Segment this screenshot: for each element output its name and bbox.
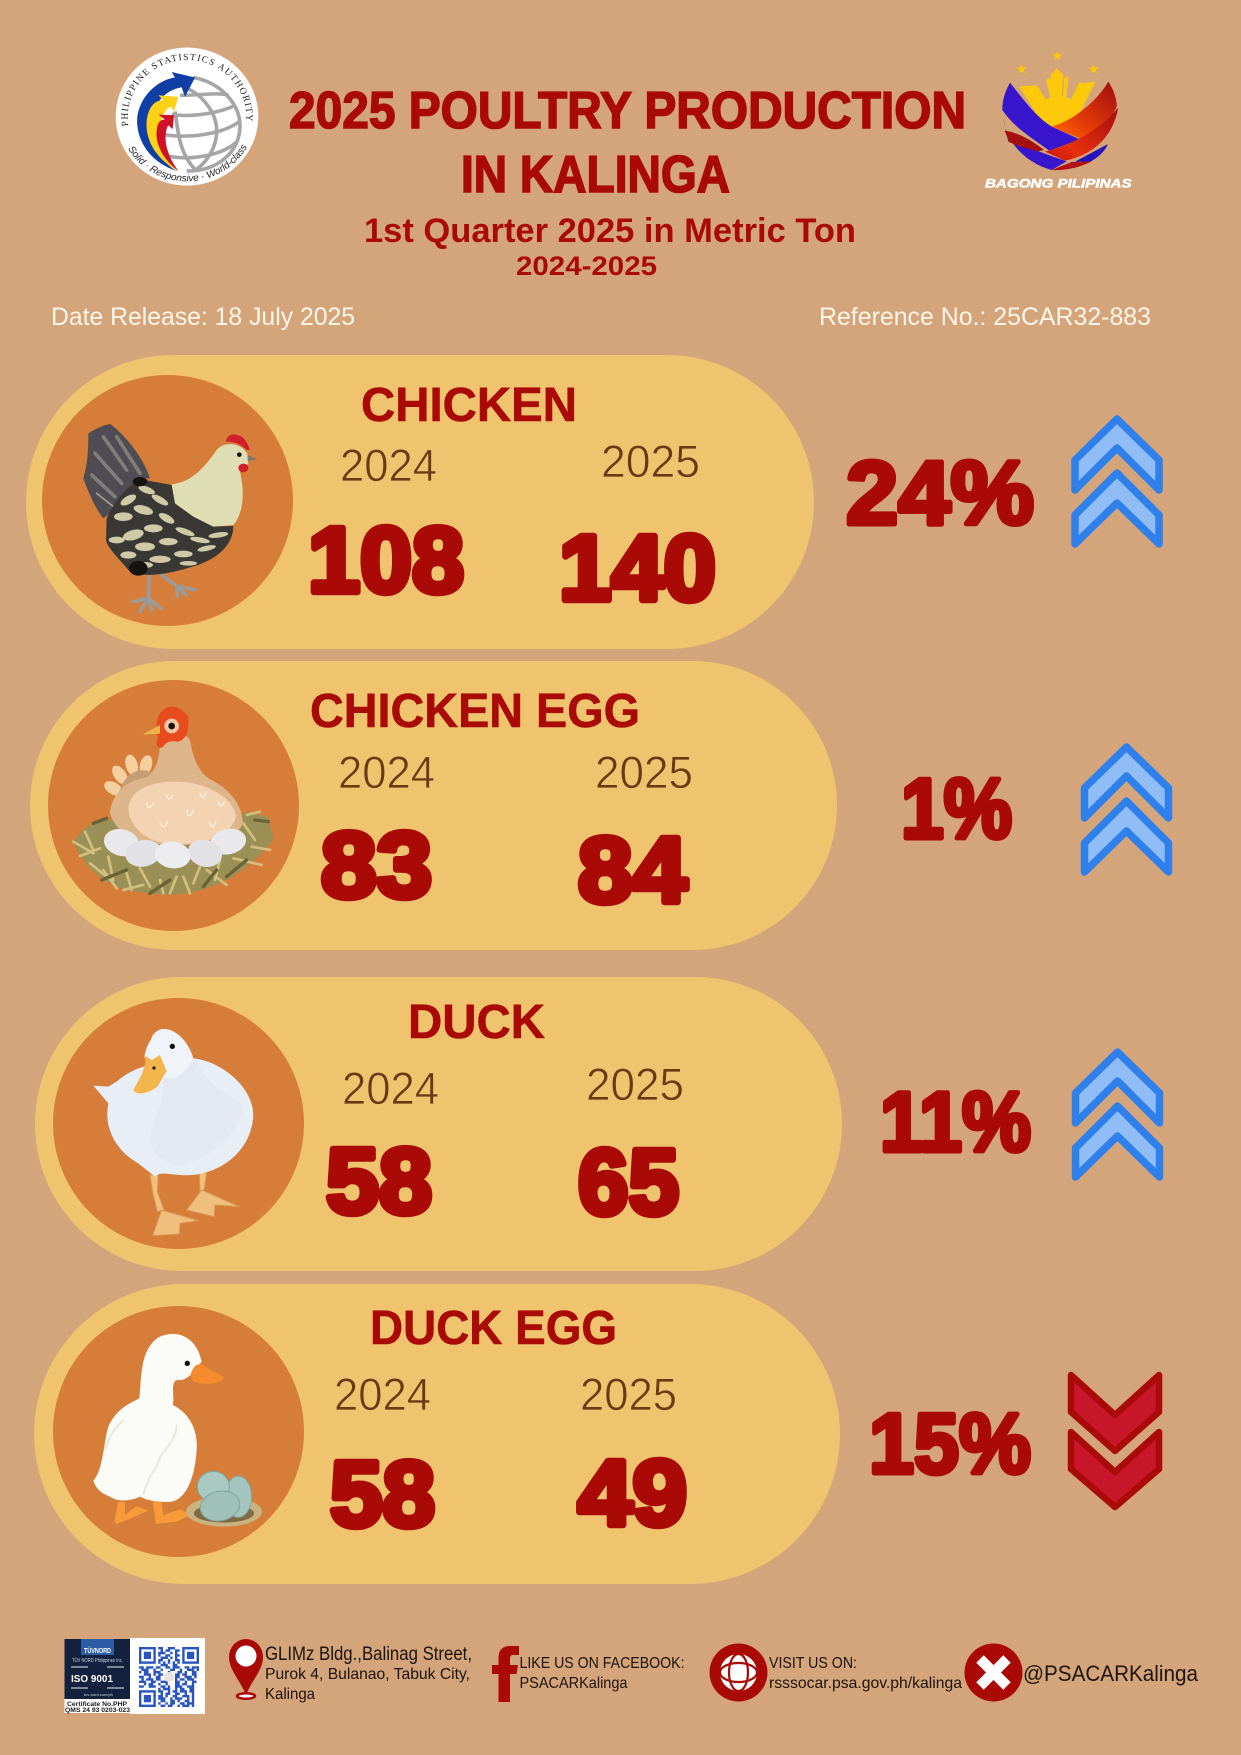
logo: Bagong Pilipinas: BAGONG PILIPINAS xyxy=(985,177,1132,191)
badge: ISO 9001 certification: TÜVNORD xyxy=(84,1646,111,1655)
year 2024: 2024 xyxy=(338,747,435,798)
badge: ISO 9001 certification: TÜV NORD Philippines Inc. xyxy=(72,1657,123,1664)
value 2025: 140 xyxy=(559,516,716,620)
category label: CHICKEN xyxy=(361,378,577,432)
icon: X social xyxy=(964,1644,1022,1702)
icon: globe xyxy=(710,1644,768,1702)
value 2025: 49 xyxy=(578,1441,687,1545)
title: IN KALINGA xyxy=(461,146,730,204)
address: Purok 4, Bulanao, Tabuk City, xyxy=(265,1666,470,1683)
logo: Bagong Pilipinas xyxy=(985,51,1132,191)
address: GLIMz Bldg.,Balinag Street, xyxy=(265,1644,472,1665)
website text: rsssocar.psa.gov.ph/kalinga xyxy=(769,1675,962,1692)
icon: duck xyxy=(93,1029,253,1236)
category label: CHICKEN EGG xyxy=(310,684,640,738)
logo: Philippine Statistics Authority: Solid · Responsive · World-class xyxy=(128,144,246,182)
badge: ISO 9001 certification: QMS 24 93 0203-023 xyxy=(65,1708,131,1714)
icon: hen on nest xyxy=(73,707,273,895)
category label: DUCK xyxy=(408,995,545,1049)
year 2024: 2024 xyxy=(340,440,437,491)
title xyxy=(289,82,966,204)
value 2024: 58 xyxy=(330,1442,435,1546)
X handle: @PSACARKalinga xyxy=(1023,1661,1199,1686)
arrow: duck egg down xyxy=(1071,1375,1159,1507)
logo: Philippine Statistics Authority xyxy=(116,48,258,186)
subtitle: years: 2024-2025 xyxy=(516,251,657,281)
reference number: Reference No.: 25CAR32-883 xyxy=(819,303,1151,331)
facebook text: PSACARKalinga xyxy=(520,1675,628,1692)
icon: stars xyxy=(1016,51,1099,74)
panel: chicken egg xyxy=(30,661,837,950)
arrow: duck up xyxy=(1076,1052,1160,1177)
year 2024: 2024 xyxy=(334,1369,431,1420)
badge: ISO 9001 certification xyxy=(64,1639,131,1714)
arrow: chicken up xyxy=(1075,419,1159,544)
category label: DUCK EGG xyxy=(370,1301,617,1355)
logo: Philippine Statistics Authority: PHILIPPINE STATISTICS AUTHORITY xyxy=(121,54,253,126)
address: Kalinga xyxy=(265,1686,315,1703)
QR code xyxy=(130,1638,205,1714)
website text xyxy=(769,1655,962,1692)
badge: ISO 9001 certification: tuv-nord.com/ph xyxy=(84,1692,113,1697)
panel: duck xyxy=(35,977,842,1271)
change: duck: 11% xyxy=(880,1075,1031,1169)
badge: ISO 9001 certification: ISO 9001 xyxy=(71,1674,113,1685)
year 2025: 2025 xyxy=(586,1059,684,1110)
icon: location pin xyxy=(229,1639,263,1699)
value 2024: 83 xyxy=(321,813,432,917)
address xyxy=(265,1644,472,1703)
value 2025: 65 xyxy=(578,1130,679,1234)
date release: Date Release: 18 July 2025 xyxy=(51,303,355,331)
year 2025: 2025 xyxy=(595,747,693,798)
badge: ISO 9001 certification: Certificate No.PHP xyxy=(67,1702,127,1708)
year 2025: 2025 xyxy=(580,1369,677,1420)
change: chicken: 24% xyxy=(846,444,1034,544)
panel: chicken xyxy=(26,355,814,649)
facebook text xyxy=(520,1655,684,1692)
value 2025: 84 xyxy=(578,818,687,922)
icon: chicken xyxy=(83,424,258,612)
subtitle: 1st Quarter 2025 in Metric Ton xyxy=(364,212,856,250)
icon: duck and eggs xyxy=(93,1334,262,1527)
year 2025: 2025 xyxy=(601,436,700,487)
icon: sun xyxy=(1019,68,1095,130)
title: 2025 POULTRY PRODUCTION xyxy=(289,82,966,140)
value 2024: 58 xyxy=(326,1129,432,1233)
change: duck egg: 15% xyxy=(869,1397,1031,1492)
change: chicken egg: 1% xyxy=(901,762,1012,857)
icon: facebook xyxy=(492,1646,519,1702)
value 2024: 108 xyxy=(308,508,464,612)
website text: VISIT US ON: xyxy=(769,1655,857,1672)
year 2024: 2024 xyxy=(342,1063,439,1114)
panel: duck egg xyxy=(34,1284,840,1584)
facebook text: LIKE US ON FACEBOOK: xyxy=(520,1655,684,1672)
arrow: chicken egg up xyxy=(1084,747,1168,872)
